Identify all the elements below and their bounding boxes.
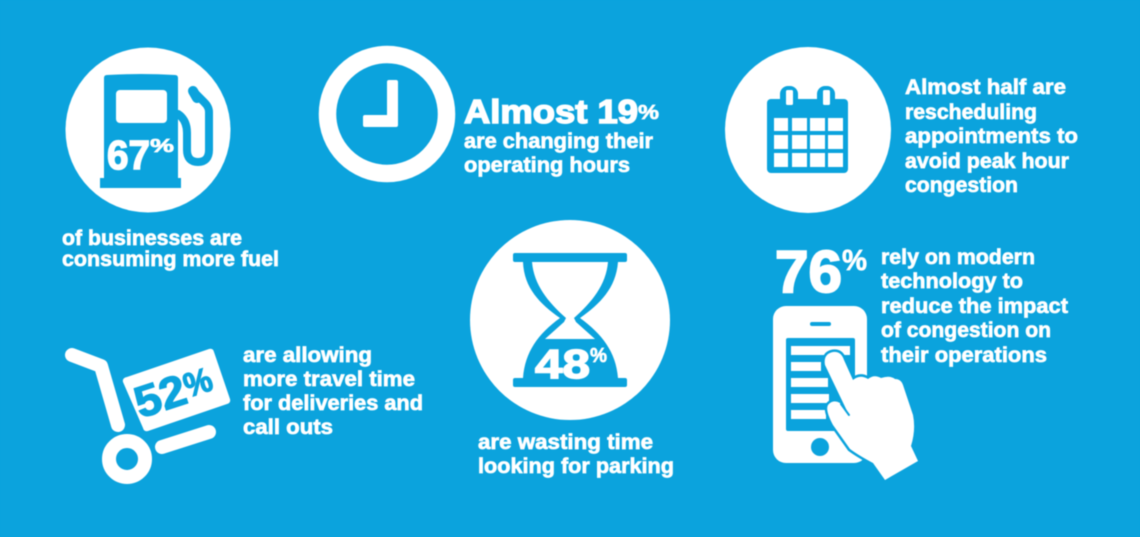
text: almost half: appointments to xyxy=(905,125,1078,148)
text: allowing more travel time xyxy=(243,344,423,439)
text: of businesses: of businesses are xyxy=(62,227,242,250)
stat: 48%: % xyxy=(590,345,607,367)
text: wasting time: are wasting time xyxy=(478,431,653,454)
text: wasting time: looking for parking xyxy=(478,455,674,478)
text: wasting time xyxy=(478,431,674,478)
text: almost half xyxy=(905,76,1078,197)
text: rely on modern technology: their operations xyxy=(881,344,1047,367)
panel: delivery travel time xyxy=(72,344,423,477)
icon: smartphone with pointing hand xyxy=(773,306,918,480)
stat: 76%: 76 xyxy=(775,239,842,305)
text: allowing more travel time: for deliveries and xyxy=(243,392,423,415)
text: of businesses xyxy=(62,227,279,271)
text: allowing more travel time: call outs xyxy=(243,416,333,439)
panel: rescheduling appointments xyxy=(725,47,1078,213)
text: rely on modern technology: reduce the impact xyxy=(881,295,1068,318)
stat: 52%: % xyxy=(179,361,217,405)
text: of businesses: consuming more fuel xyxy=(62,248,279,271)
stat: 67% xyxy=(107,132,174,178)
stat: 48% xyxy=(535,341,607,387)
stat: 48%: 48 xyxy=(535,341,590,387)
icon: hourglass in circle xyxy=(470,220,670,420)
text: almost 19%: % xyxy=(638,102,659,124)
stat: 67%: 67 xyxy=(107,132,150,178)
text: almost 19%: operating hours xyxy=(464,154,630,177)
panel: wasting time parking xyxy=(470,220,674,478)
text: rely on modern technology: rely on modern xyxy=(881,246,1035,269)
stat: 52% xyxy=(128,357,219,428)
text: almost 19%: Almost 19 xyxy=(464,93,638,130)
text: almost 19%: are changing their xyxy=(464,130,653,153)
panel: modern technology xyxy=(773,239,1068,480)
text: allowing more travel time: more travel time xyxy=(243,368,415,391)
icon: clock xyxy=(328,54,446,174)
stat: 67%: % xyxy=(150,136,174,156)
text: allowing more travel time: are allowing xyxy=(243,344,372,367)
icon: fuel pump in circle xyxy=(66,48,230,212)
stat: 76%: % xyxy=(842,245,867,277)
icon: hand truck xyxy=(72,349,230,477)
text: almost half: Almost half are xyxy=(905,76,1066,99)
stat: 52%: 52 xyxy=(128,365,193,428)
text: almost half: rescheduling xyxy=(905,101,1037,124)
icon: calendar in circle xyxy=(725,47,891,213)
text: almost 19% xyxy=(464,93,659,177)
text: rely on modern technology: technology to xyxy=(881,270,1023,293)
text: almost half: congestion xyxy=(905,174,1018,197)
panel: fuel consumption xyxy=(62,48,279,271)
text: rely on modern technology: of congestion on xyxy=(881,319,1051,342)
text: almost half: avoid peak hour xyxy=(905,150,1069,173)
panel: operating hours xyxy=(328,54,659,177)
text: rely on modern technology xyxy=(881,246,1068,367)
